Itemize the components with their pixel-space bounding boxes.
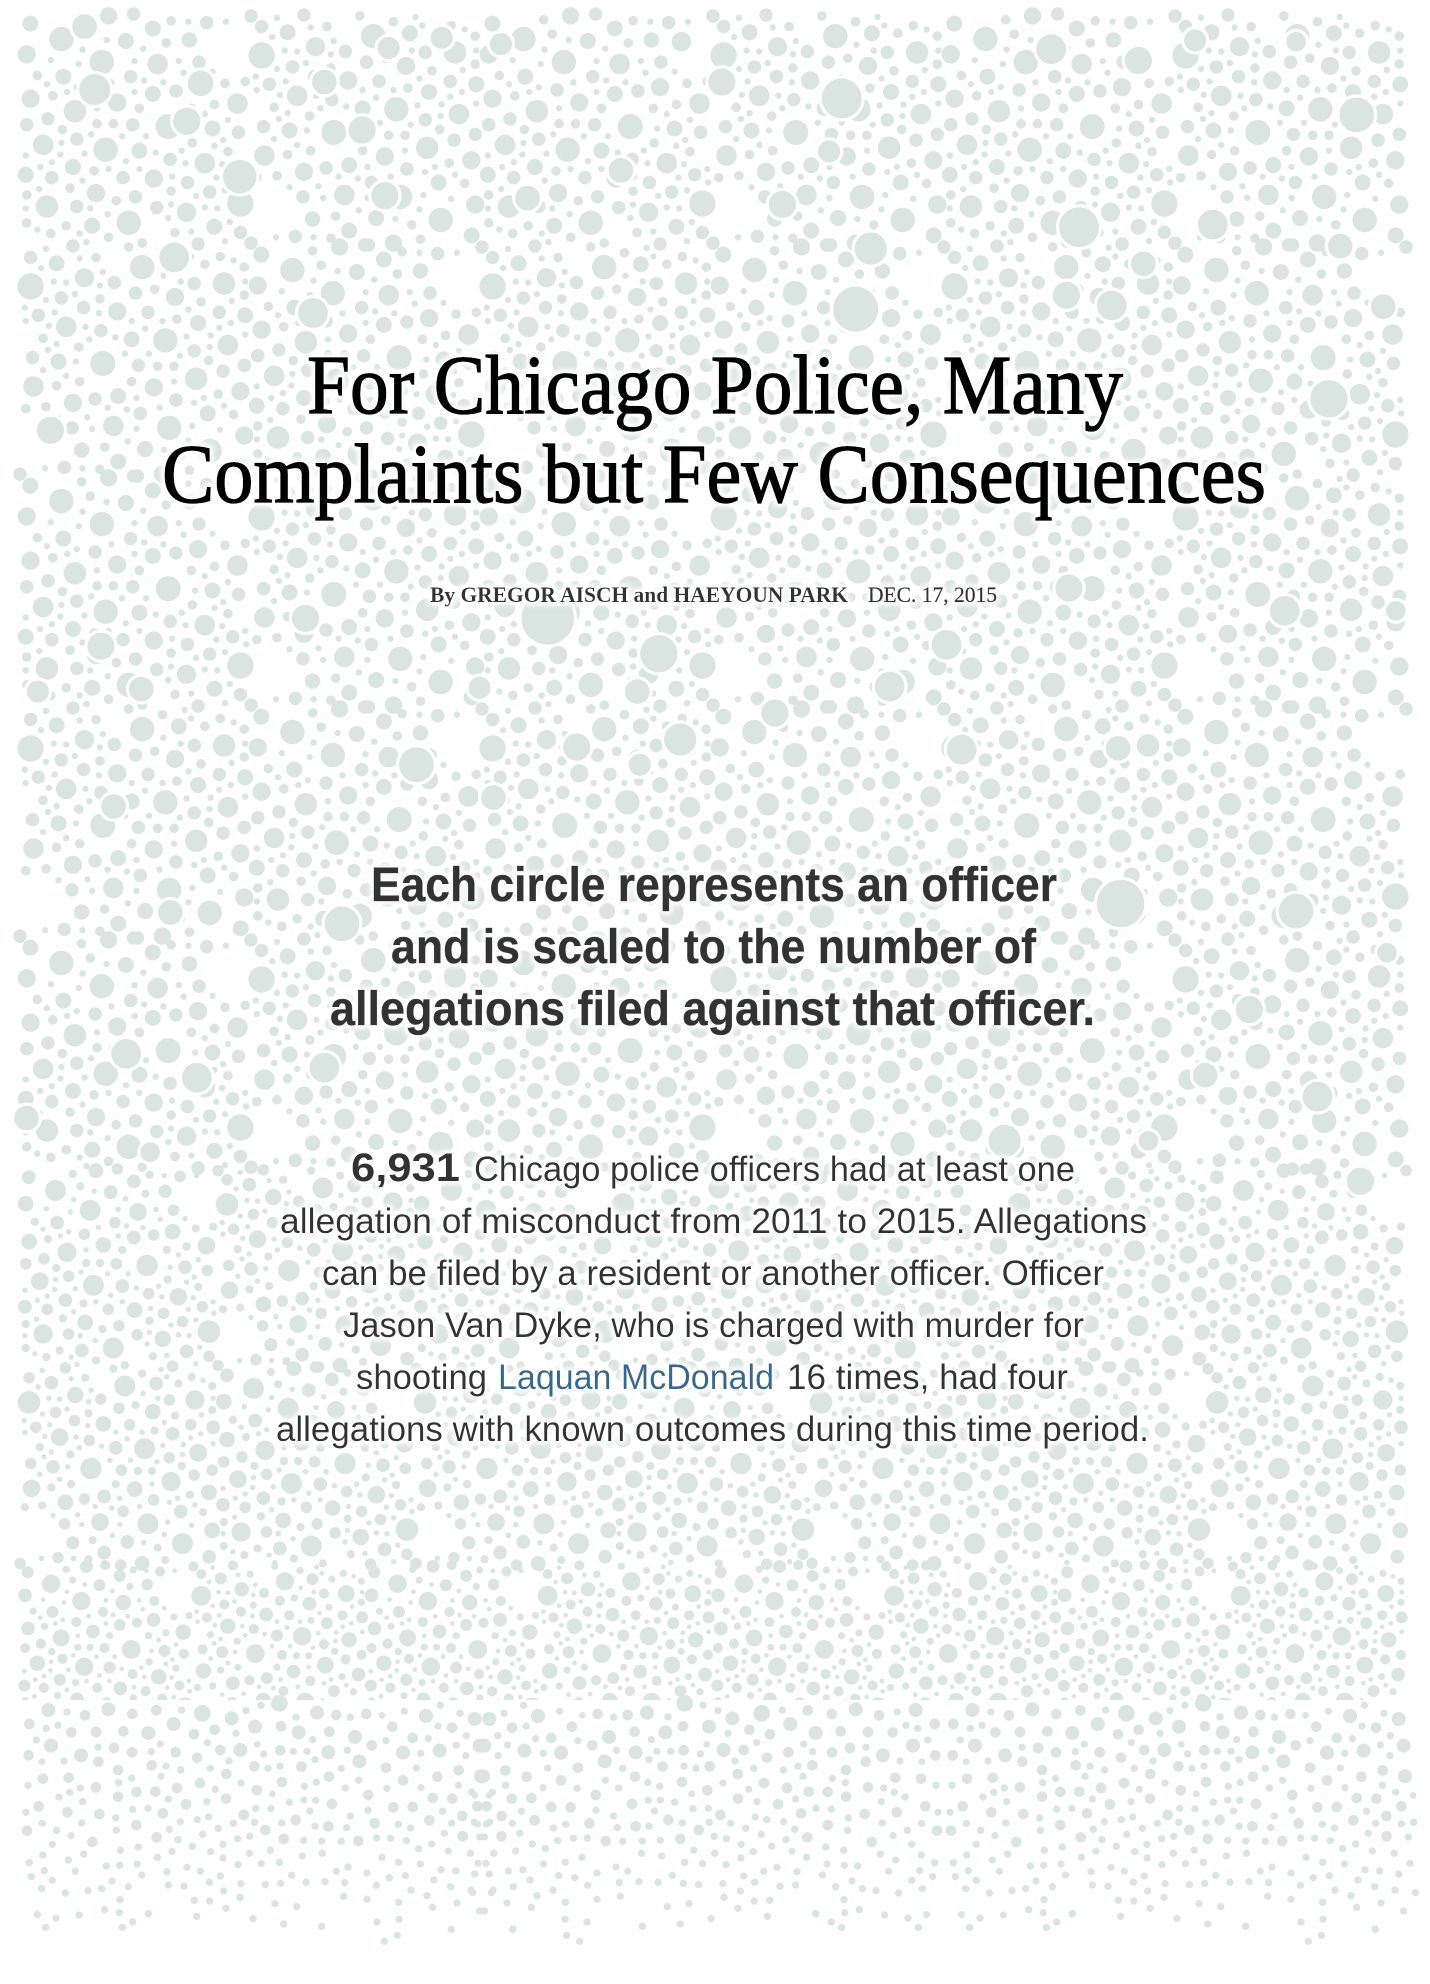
title: For Chicago Police, Many	[307, 339, 1123, 432]
body text with key figure: Laquan McDonald	[498, 1358, 774, 1397]
body text with key figure: 6,931	[351, 1146, 460, 1190]
body text with key figure: Chicago police officers had at least one	[474, 1150, 1075, 1189]
subheading: what each circle means	[330, 859, 1095, 1036]
title: Complaints but Few Consequences	[162, 428, 1266, 521]
body text with key figure: allegation of misconduct from 2011 to 2015. Allegations	[280, 1202, 1147, 1241]
body text with key figure: allegations with known outcomes during this time period.	[276, 1410, 1149, 1449]
byline and date: By GREGOR AISCH and HAEYOUN PARK	[430, 582, 848, 607]
body text with key figure: Jason Van Dyke, who is charged with murder for	[343, 1306, 1084, 1345]
body text with key figure: can be filed by a resident or another officer. Officer	[322, 1254, 1104, 1293]
subheading: what each circle means: Each circle represents an officer	[371, 859, 1057, 912]
byline and date: DEC. 17, 2015	[868, 582, 997, 607]
body text with key figure	[276, 1146, 1149, 1449]
subheading: what each circle means: allegations filed against that officer.	[330, 983, 1095, 1036]
subheading: what each circle means: and is scaled to the number of	[391, 921, 1037, 974]
title	[162, 339, 1266, 521]
body text with key figure: 16 times, had four	[787, 1358, 1068, 1397]
body text with key figure: shooting	[356, 1358, 487, 1397]
